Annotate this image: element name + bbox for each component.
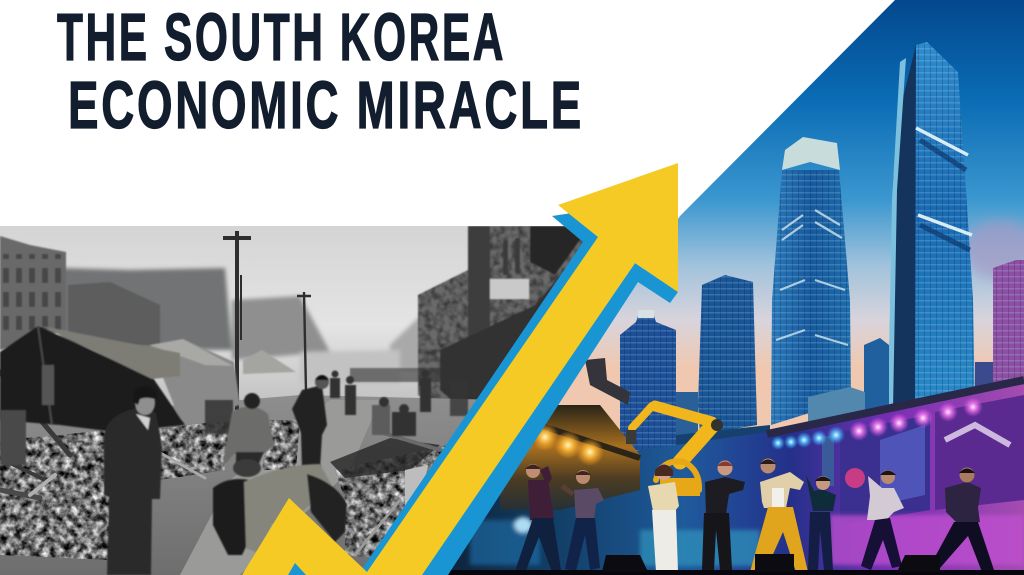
rounded glass tower — [771, 137, 851, 425]
dancer 6 — [806, 475, 836, 570]
person: bent-over labourer with companion — [213, 459, 347, 555]
lighting truss — [767, 380, 1024, 434]
rubble piles — [0, 420, 470, 560]
gradient sky — [558, 0, 1024, 450]
ground and road — [0, 395, 500, 575]
person: man with hands on hips — [292, 375, 329, 470]
violet dusk cloud on right edge — [964, 220, 1024, 280]
stage spotlights — [771, 397, 983, 450]
distant crowd — [0, 368, 468, 465]
blue notch at arrow base — [288, 563, 306, 575]
industrial gantry with warm lights — [500, 358, 640, 510]
dancer 4 — [702, 460, 745, 570]
tents — [0, 326, 296, 432]
stage backdrop — [440, 378, 1024, 575]
low and side buildings — [676, 260, 1024, 445]
title line 2: ECONOMIC MIRACLE — [68, 68, 584, 143]
blue arrow shadow, left band — [358, 213, 602, 575]
dancer 2 — [560, 470, 604, 571]
right damaged buildings — [417, 226, 583, 400]
yellow robot arm — [626, 406, 723, 496]
title line 1: THE SOUTH KOREA — [57, 0, 506, 75]
left stone building — [0, 236, 160, 350]
growth arrow — [242, 163, 678, 575]
dancer 5 — [750, 458, 808, 572]
stage floor — [440, 570, 1024, 575]
dancer 3 — [648, 464, 679, 572]
distant buildings — [60, 268, 450, 385]
person: man in dark jacket standing — [104, 386, 162, 575]
photo: modern skyline, robot arm and K-pop stage — [440, 0, 1024, 575]
beams and debris — [0, 372, 440, 555]
LED screens — [822, 395, 1024, 525]
dancer group — [515, 458, 994, 573]
photo: post-war ruined street in black and white — [0, 226, 600, 575]
dancer 7 — [861, 470, 904, 570]
dancer 8 — [936, 468, 994, 570]
blue arrow shadow, right band — [420, 263, 678, 575]
hazy sky — [0, 226, 600, 426]
person: worker seen from behind — [222, 393, 274, 470]
stage monitors — [602, 554, 940, 572]
utility poles — [223, 231, 311, 410]
lower stage glow — [470, 515, 1024, 566]
title — [57, 0, 584, 143]
dancer 1 — [515, 464, 561, 573]
tall glass tower — [888, 42, 975, 410]
yellow arrow — [242, 163, 678, 575]
mid tower — [698, 275, 757, 435]
left crowned tower — [620, 310, 676, 450]
